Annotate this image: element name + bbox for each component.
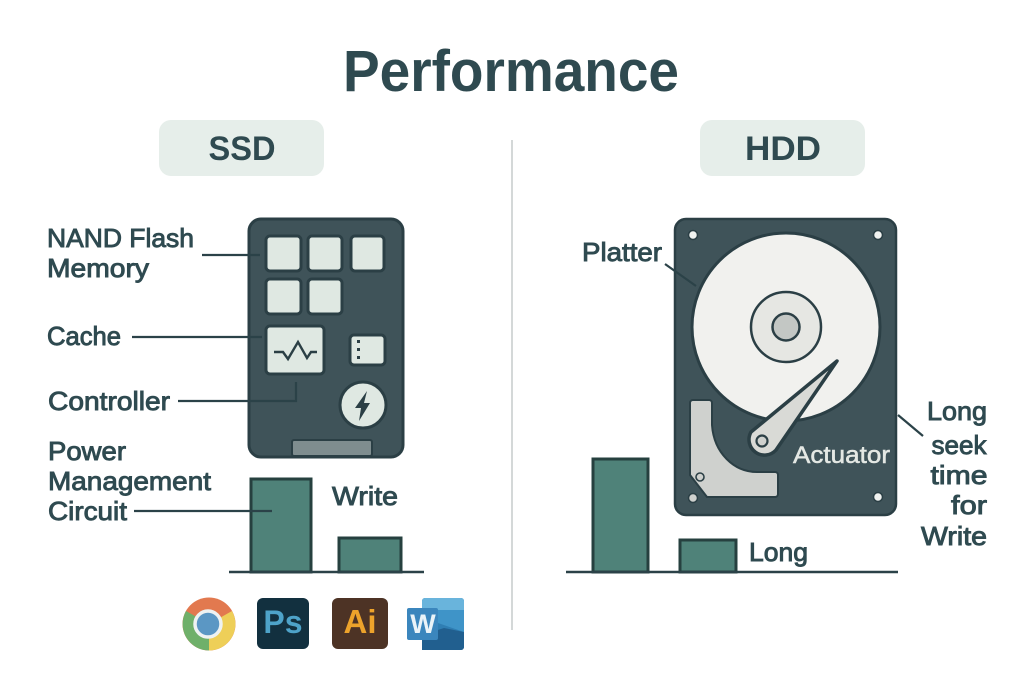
SSD bar chart — [134, 479, 424, 572]
icon: Word — [407, 598, 464, 650]
long seek time label: Write — [921, 521, 987, 551]
controller chip — [350, 335, 385, 365]
HDD heading — [700, 120, 865, 176]
icon: Photoshop — [257, 598, 309, 649]
actuator label: Actuator — [793, 442, 890, 469]
title: Performance — [343, 39, 679, 104]
cache chip — [266, 326, 324, 374]
HDD diagram — [675, 219, 896, 515]
HDD bar chart — [566, 459, 898, 572]
SSD labels: Controller — [48, 386, 170, 416]
SSD heading: SSD — [208, 130, 276, 168]
platter label: Platter — [582, 237, 662, 267]
platter — [692, 233, 880, 421]
long seek time label: time — [930, 460, 988, 490]
SSD labels: NAND Flash — [47, 223, 194, 253]
long seek time label: seek — [932, 430, 987, 460]
icon: Illustrator: Ai — [344, 603, 376, 640]
write label: Write — [332, 481, 398, 511]
icon: Photoshop: Ps — [263, 604, 303, 640]
SSD labels: Power — [48, 436, 126, 466]
SSD labels: Memory — [47, 253, 149, 283]
SSD labels: Management — [48, 466, 212, 496]
icon: Chrome — [182, 598, 236, 650]
HDD heading: HDD — [745, 130, 821, 168]
SSD labels: Circuit — [48, 496, 128, 526]
SSD diagram — [249, 219, 403, 457]
long seek time label: for — [951, 490, 987, 520]
SSD heading — [159, 120, 324, 176]
SSD labels — [47, 223, 212, 526]
connector — [292, 440, 372, 456]
icon: Illustrator — [332, 598, 388, 649]
power circuit icon — [340, 382, 386, 428]
SSD labels: Cache — [47, 321, 121, 351]
long seek time label — [898, 396, 988, 551]
platter label — [582, 237, 696, 286]
icon: Word: W — [410, 609, 436, 639]
long label: Long — [749, 537, 808, 567]
actuator base — [688, 400, 778, 502]
screws — [688, 230, 882, 502]
SSD leader lines — [132, 255, 296, 401]
long seek time label: Long — [927, 396, 987, 426]
actuator arm — [749, 361, 837, 455]
NAND cells — [266, 236, 384, 314]
